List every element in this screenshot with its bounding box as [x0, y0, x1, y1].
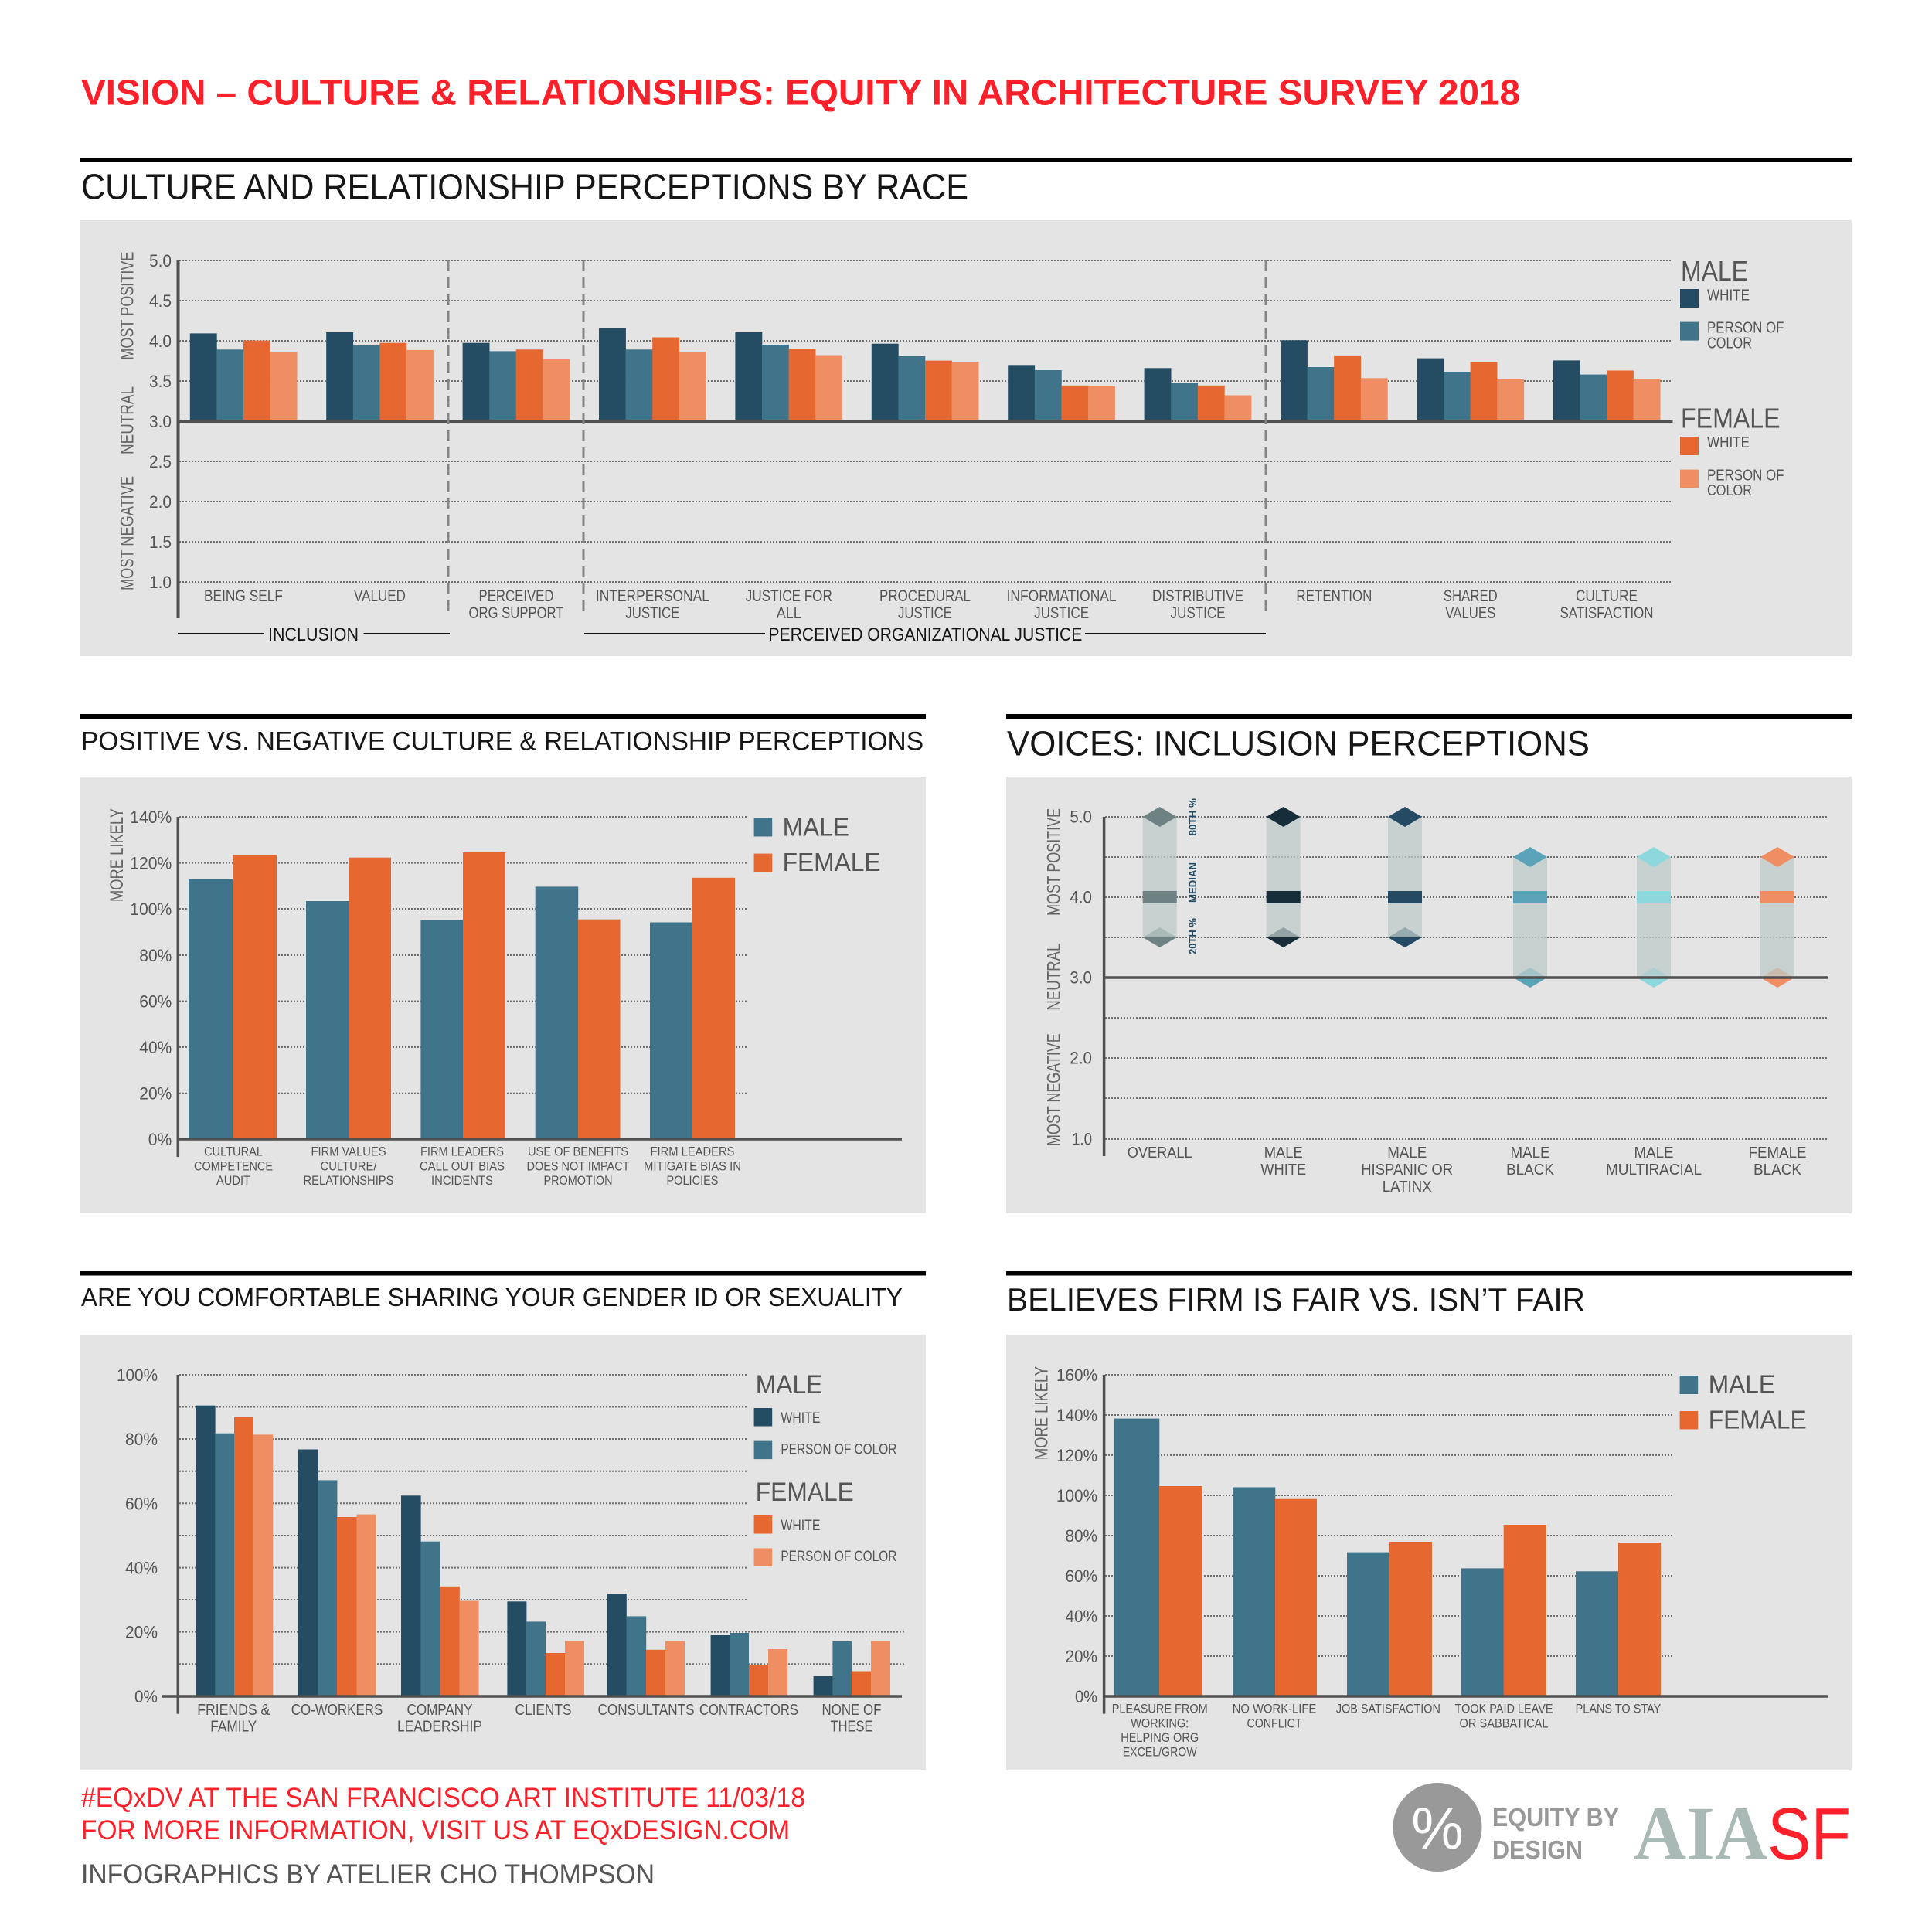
y axis labels: [117, 1366, 158, 1706]
category labels: JUSTICE FOR: [746, 587, 832, 605]
bar chart: male vs female perceptions: [189, 852, 735, 1139]
logo: equity by design: [1393, 1783, 1619, 1872]
y axis labels: 0%: [134, 1687, 158, 1706]
category labels: HELPING ORG: [1121, 1730, 1199, 1745]
category labels: JUSTICE: [1170, 604, 1226, 622]
category labels: HISPANIC OR: [1361, 1162, 1453, 1179]
percentile key labels: 20TH %: [1186, 917, 1199, 954]
category labels: CULTURAL: [204, 1145, 263, 1159]
legend: FEMALE: [756, 1478, 854, 1507]
y axis labels: 4.0: [149, 332, 172, 351]
category labels: SATISFACTION: [1560, 604, 1654, 622]
y axis labels: 4.5: [149, 291, 172, 311]
category labels: CONFLICT: [1247, 1716, 1301, 1730]
category labels: JOB SATISFACTION: [1336, 1702, 1440, 1716]
axis scale labels: [1043, 808, 1064, 1146]
y axis labels: 40%: [1065, 1607, 1097, 1626]
category labels: FIRM VALUES: [311, 1145, 386, 1159]
y axis labels: 20%: [139, 1084, 172, 1104]
y axis labels: [1056, 1366, 1097, 1706]
category labels: SHARED: [1444, 587, 1498, 605]
y axis labels: 20%: [125, 1623, 158, 1642]
legend: [754, 1370, 896, 1566]
legend: [1680, 1370, 1807, 1434]
category labels: TOOK PAID LEAVE: [1454, 1702, 1553, 1716]
heading: voices: VOICES: INCLUSION PERCEPTIONS: [1007, 723, 1590, 764]
range: male hispanic or latinx: [1388, 807, 1422, 947]
y axis labels: 3.0: [1070, 968, 1092, 988]
legend: MALE: [783, 813, 849, 841]
y axis labels: [149, 251, 172, 592]
y axis labels: 140%: [1056, 1406, 1097, 1425]
category labels: CONTRACTORS: [699, 1702, 798, 1719]
category labels: VALUES: [1445, 604, 1495, 622]
percentile key labels: 80TH %: [1186, 798, 1199, 836]
y axis labels: 140%: [130, 808, 172, 827]
panel: culture and relationship perceptions by race: [80, 158, 1852, 656]
legend: FEMALE: [1709, 1406, 1807, 1434]
category labels: USE OF BENEFITS: [528, 1145, 628, 1159]
y axis labels: 3.5: [149, 372, 172, 391]
panel: positive vs negative perceptions: [80, 714, 926, 1213]
category labels: [1128, 1145, 1807, 1196]
category labels: LEADERSHIP: [397, 1719, 482, 1736]
category labels: CONSULTANTS: [598, 1702, 694, 1719]
category labels: PLEASURE FROM: [1112, 1702, 1208, 1716]
logo: equity by design: %: [1411, 1796, 1464, 1862]
logo: equity by design: EQUITY BY: [1492, 1803, 1619, 1832]
legend: FEMALE: [783, 848, 881, 876]
footer text: INFOGRAPHICS BY ATELIER CHO THOMPSON: [81, 1859, 655, 1889]
legend: PERSON OF COLOR: [781, 1549, 896, 1565]
legend: FEMALE: [1681, 402, 1781, 434]
logo: aiasf: SF: [1767, 1793, 1851, 1876]
category labels: INTERPERSONAL: [596, 587, 709, 605]
percentile key labels: MEDIAN: [1186, 862, 1199, 903]
y axis labels: 2.0: [149, 492, 172, 512]
y axis labels: 80%: [125, 1430, 158, 1449]
category labels: OVERALL: [1128, 1145, 1192, 1162]
category labels: OR SABBATICAL: [1459, 1716, 1549, 1730]
category labels: NO WORK-LIFE: [1233, 1702, 1316, 1716]
category labels: [194, 1145, 741, 1188]
category labels: MITIGATE BIAS IN: [644, 1158, 741, 1173]
percentile key labels: [1186, 798, 1199, 954]
y axis labels: 120%: [130, 854, 172, 873]
logo: aiasf: AIA: [1634, 1791, 1767, 1876]
legend: [1680, 255, 1784, 499]
axis scale labels: MOST NEGATIVE: [117, 476, 138, 590]
y axis labels: 100%: [1056, 1486, 1097, 1505]
category labels: CLIENTS: [515, 1702, 572, 1719]
legend: PERSON OF: [1707, 467, 1784, 484]
range: male black: [1513, 847, 1547, 988]
legend: MALE: [756, 1370, 822, 1400]
category labels: EXCEL/GROW: [1123, 1745, 1197, 1760]
category labels: MALE: [1510, 1145, 1550, 1162]
category labels: CALL OUT BIAS: [420, 1158, 505, 1173]
category labels: [197, 1702, 881, 1736]
panel: comfortable sharing gender id or sexuality: [80, 1271, 926, 1770]
category labels: AUDIT: [216, 1173, 250, 1188]
legend: MALE: [1709, 1370, 1775, 1399]
category labels: WORKING:: [1131, 1716, 1189, 1730]
category labels: INCIDENTS: [431, 1173, 493, 1188]
category labels: CULTURE: [1576, 587, 1638, 605]
category labels: BEING SELF: [204, 587, 283, 605]
category labels: COMPANY: [406, 1702, 473, 1719]
axis scale labels: MOST POSITIVE: [117, 252, 138, 360]
bar chart: perceptions by race: [190, 328, 1660, 421]
category labels: MALE: [1634, 1145, 1674, 1162]
title: VISION – CULTURE & RELATIONSHIPS: EQUITY IN ARCHITECTURE SURVEY 2018: [81, 73, 1520, 113]
y axis labels: 60%: [139, 992, 172, 1012]
category labels: LATINX: [1383, 1179, 1432, 1196]
category labels: MALE: [1264, 1145, 1303, 1162]
legend: PERSON OF: [1707, 319, 1784, 336]
y axis labels: 60%: [1065, 1566, 1097, 1586]
category labels: VALUED: [354, 587, 406, 605]
axis scale labels: [117, 252, 138, 590]
legend: WHITE: [1707, 434, 1750, 451]
category labels: PERCEIVED: [479, 587, 553, 605]
category labels: THESE: [830, 1719, 873, 1736]
bar chart: comfort sharing by audience: [196, 1406, 890, 1696]
category labels: CO-WORKERS: [291, 1702, 383, 1719]
category labels: COMPETENCE: [194, 1158, 273, 1173]
category labels: FEMALE: [1748, 1145, 1807, 1162]
category labels: CULTURE/: [320, 1158, 377, 1173]
category labels: FAMILY: [210, 1719, 257, 1736]
y axis labels: 40%: [139, 1038, 172, 1057]
y axis labels: [1070, 807, 1092, 1148]
heading: positive vs negative: POSITIVE VS. NEGATIVE CULTURE & RELATIONSHIP PERCEPTIONS: [81, 726, 923, 756]
heading: comfortable sharing: ARE YOU COMFORTABLE SHARING YOUR GENDER ID OR SEXUALITY: [81, 1284, 903, 1312]
legend: WHITE: [781, 1518, 820, 1534]
axis scale labels: NEUTRAL: [1043, 944, 1064, 1011]
bar chart: fair vs not fair: [1114, 1419, 1661, 1696]
category labels: PROCEDURAL: [879, 587, 971, 605]
category labels: MULTIRACIAL: [1606, 1162, 1702, 1179]
logo: aiasf: [1634, 1791, 1851, 1876]
legend: WHITE: [781, 1410, 820, 1427]
category labels: DOES NOT IMPACT: [527, 1158, 629, 1173]
y axis labels: 1.5: [149, 532, 172, 552]
bracket: perceived organizational justice: PERCEIVED ORGANIZATIONAL JUSTICE: [768, 624, 1082, 645]
category labels: RELATIONSHIPS: [303, 1173, 394, 1188]
bracket: inclusion: INCLUSION: [268, 624, 359, 645]
axis scale labels: NEUTRAL: [117, 386, 138, 454]
axis title: more likely: MORE LIKELY: [107, 808, 128, 902]
category labels: POLICIES: [666, 1173, 719, 1188]
legend: COLOR: [1707, 335, 1752, 352]
y axis labels: 0%: [148, 1130, 172, 1149]
legend: [754, 813, 881, 876]
y axis labels: 4.0: [1070, 887, 1092, 907]
axis scale labels: MOST POSITIVE: [1043, 808, 1064, 916]
category labels: JUSTICE: [1034, 604, 1089, 622]
category labels: JUSTICE: [625, 604, 679, 622]
y axis labels: 80%: [139, 946, 172, 965]
footer text: #EQxDV AT THE SAN FRANCISCO ART INSTITUTE 11/03/18: [81, 1783, 805, 1813]
y axis labels: 3.0: [149, 412, 172, 431]
axis scale labels: MOST NEGATIVE: [1043, 1033, 1064, 1146]
category labels: RETENTION: [1296, 587, 1372, 605]
y axis labels: 100%: [117, 1366, 158, 1385]
panel: believes firm is fair vs isn't fair: [1006, 1271, 1852, 1770]
footer text: [81, 1783, 805, 1889]
category labels: MALE: [1387, 1145, 1427, 1162]
category labels: WHITE: [1260, 1162, 1306, 1179]
y axis labels: 0%: [1075, 1687, 1097, 1706]
y axis labels: 2.5: [149, 452, 172, 471]
category labels: FIRM LEADERS: [651, 1145, 734, 1159]
category labels: PROMOTION: [544, 1173, 612, 1188]
legend: MALE: [1681, 255, 1748, 287]
y axis labels: 1.0: [149, 573, 172, 592]
logo: equity by design: DESIGN: [1492, 1835, 1583, 1864]
range: overall: [1143, 807, 1177, 947]
y axis labels: 100%: [130, 900, 172, 919]
category labels: FIRM LEADERS: [420, 1145, 504, 1159]
range: female black: [1760, 847, 1794, 988]
category labels: [1112, 1702, 1661, 1760]
category labels: ORG SUPPORT: [468, 604, 564, 622]
y axis labels: 2.0: [1070, 1048, 1092, 1068]
category labels: DISTRIBUTIVE: [1152, 587, 1243, 605]
y axis labels: 5.0: [149, 251, 172, 270]
axis title: more likely: MORE LIKELY: [1032, 1366, 1053, 1460]
category labels: PLANS TO STAY: [1576, 1702, 1661, 1716]
legend: PERSON OF COLOR: [781, 1442, 896, 1458]
range: male white: [1267, 807, 1301, 947]
category labels: BLACK: [1506, 1162, 1555, 1179]
y axis labels: 20%: [1065, 1647, 1097, 1666]
y axis labels: 120%: [1056, 1446, 1097, 1465]
heading: perceptions by race: CULTURE AND RELATIONSHIP PERCEPTIONS BY RACE: [81, 167, 968, 207]
y axis labels: 80%: [1065, 1526, 1097, 1546]
y axis labels: 1.0: [1072, 1130, 1092, 1148]
legend: COLOR: [1707, 482, 1752, 499]
heading: firm is fair: BELIEVES FIRM IS FAIR VS. ISN’T FAIR: [1007, 1281, 1585, 1318]
category labels: JUSTICE: [898, 604, 952, 622]
y axis labels: 60%: [125, 1494, 158, 1513]
y axis labels: 40%: [125, 1559, 158, 1578]
panel: voices inclusion perceptions: [1006, 714, 1852, 1213]
category labels: NONE OF: [822, 1702, 881, 1719]
category labels: ALL: [777, 604, 801, 622]
category labels: BLACK: [1753, 1162, 1802, 1179]
y axis labels: [130, 808, 172, 1149]
range: male multiracial: [1637, 847, 1671, 988]
category labels: INFORMATIONAL: [1007, 587, 1117, 605]
footer text: FOR MORE INFORMATION, VISIT US AT EQxDESIGN.COM: [81, 1815, 790, 1845]
category labels: FRIENDS &: [197, 1702, 270, 1719]
legend: WHITE: [1707, 287, 1750, 304]
y axis labels: 160%: [1056, 1366, 1097, 1385]
category labels: [204, 587, 1654, 622]
y axis labels: 5.0: [1070, 807, 1092, 827]
